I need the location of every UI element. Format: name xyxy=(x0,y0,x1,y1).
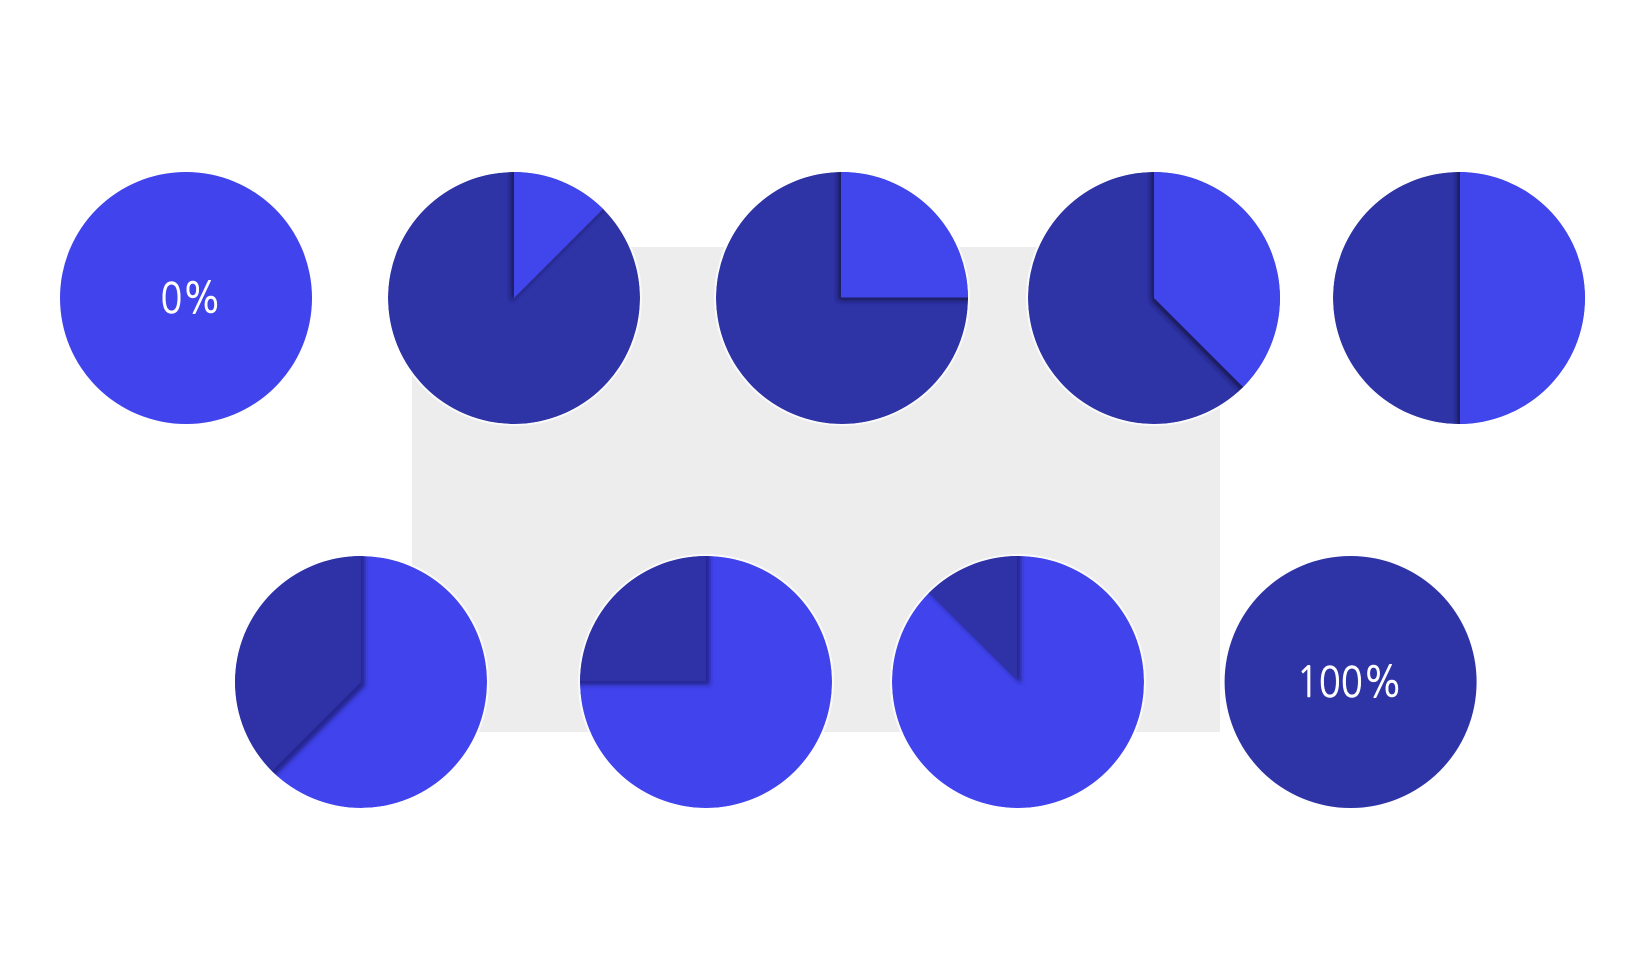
pie: seven eighths xyxy=(892,556,1144,808)
pie: three quarters xyxy=(580,556,832,808)
pale halos behind pies xyxy=(233,170,1479,810)
label: 100%: 100% xyxy=(1297,662,1403,704)
label: 0%: 0% xyxy=(160,278,222,320)
background grey rectangle xyxy=(412,247,1220,732)
pie: 100% xyxy=(1225,556,1477,808)
pie: one eighth xyxy=(388,158,640,424)
infographic canvas xyxy=(60,172,1585,808)
pie: one quarter xyxy=(716,172,968,424)
pie: one half xyxy=(1333,172,1585,424)
pie: five eighths xyxy=(235,556,487,808)
pie: three eighths xyxy=(1028,172,1280,424)
pie: 0% xyxy=(60,172,312,424)
